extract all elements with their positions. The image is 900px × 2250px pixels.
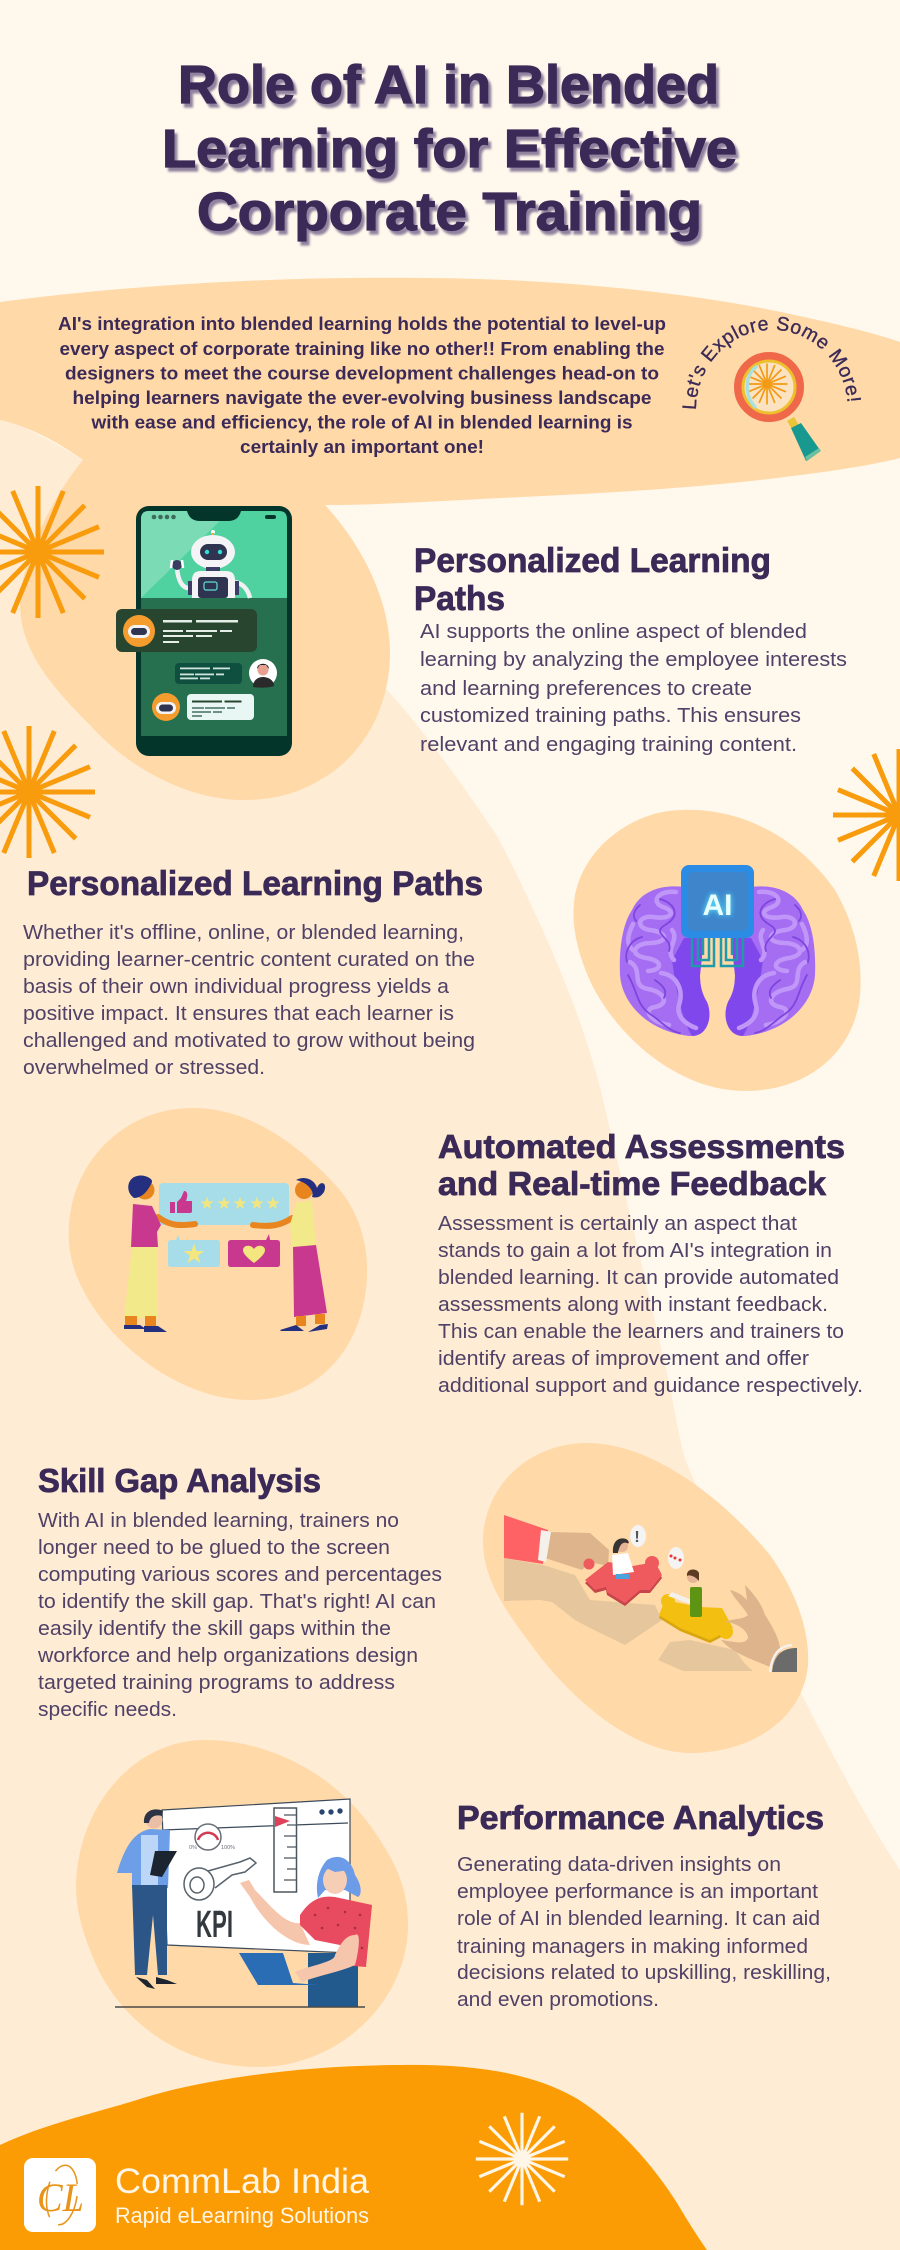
illustration: feedback people with rating card bbox=[124, 1175, 328, 1332]
man on yellow piece bbox=[668, 1570, 702, 1617]
chat bubble 1 bbox=[116, 609, 257, 652]
section 2: personalized learning paths (left) bbox=[23, 865, 483, 1079]
intro text: helping learners navigate the ever-evolving business landscape bbox=[72, 387, 652, 408]
body text: AI supports the online aspect of blended bbox=[420, 621, 807, 643]
body text: basis of their own individual progress yields a bbox=[23, 976, 450, 998]
speech bubbles bbox=[630, 1525, 684, 1569]
illustration: AI brain: AI bbox=[702, 889, 732, 922]
body text: additional support and guidance respectively. bbox=[438, 1375, 863, 1397]
body text: longer need to be glued to the screen bbox=[38, 1537, 390, 1559]
board bbox=[162, 1799, 350, 1953]
body text: workforce and help organizations design bbox=[37, 1645, 418, 1667]
body text bbox=[420, 621, 847, 756]
left person bbox=[124, 1175, 195, 1332]
footer orange shape bbox=[0, 2065, 707, 2250]
illustration: phone with chatbot bbox=[116, 506, 292, 756]
body text: computing various scores and percentages bbox=[38, 1564, 442, 1586]
body text: targeted training programs to address bbox=[38, 1672, 395, 1694]
body text: providing learner-centric content curated on the bbox=[23, 949, 475, 971]
intro text: every aspect of corporate training like no other!! From enabling the bbox=[60, 338, 664, 359]
body text bbox=[438, 1213, 863, 1397]
key bbox=[184, 1858, 256, 1900]
stars: ★ bbox=[265, 1194, 281, 1213]
body text: to identify the skill gap. That's right! AI can bbox=[38, 1591, 436, 1613]
blob: feedback background bbox=[69, 1108, 367, 1400]
blob: puzzle background bbox=[483, 1443, 808, 1753]
stars: ★ bbox=[249, 1194, 265, 1213]
body text: assessments along with instant feedback. bbox=[438, 1294, 828, 1316]
heading: Paths bbox=[414, 580, 505, 618]
laptop bbox=[239, 1953, 320, 1985]
illustration: puzzle pieces with hands bbox=[504, 1515, 797, 1672]
thermometer bbox=[274, 1808, 296, 1892]
body text: blended learning. It can provide automated bbox=[438, 1267, 839, 1289]
woman on red piece bbox=[612, 1538, 634, 1579]
intro text: designers to meet the course development challenges head-on to bbox=[65, 362, 659, 384]
heart bubble bbox=[228, 1234, 280, 1267]
star bubble bbox=[168, 1235, 220, 1267]
panel: intro band with phone blob bbox=[0, 278, 900, 800]
body text: positive impact. It ensures that each learner is bbox=[23, 1003, 454, 1025]
stars: ★ bbox=[199, 1194, 215, 1213]
KPI label: KPI bbox=[196, 1904, 233, 1946]
gauge: 100% bbox=[221, 1845, 235, 1851]
icon: magnifying glass bbox=[738, 356, 821, 461]
body text: role of AI in blended learning. It can aid bbox=[457, 1908, 820, 1930]
body text: and even promotions. bbox=[457, 1989, 659, 2011]
body text: This can enable the learners and trainers to bbox=[438, 1321, 844, 1343]
intro text: with ease and efficiency, the role of AI in blended learning is bbox=[90, 412, 632, 432]
heading: and Real-time Feedback bbox=[438, 1165, 827, 1202]
intro text bbox=[58, 313, 666, 457]
stars bbox=[199, 1194, 281, 1213]
woman bbox=[240, 1857, 372, 2007]
title bbox=[162, 55, 737, 242]
gauge bbox=[189, 1824, 235, 1851]
stars: ★ bbox=[216, 1194, 232, 1213]
red puzzle piece bbox=[584, 1556, 662, 1606]
heading: Performance Analytics bbox=[457, 1799, 824, 1836]
left hand and sleeve bbox=[504, 1515, 548, 1564]
heading: Personalized Learning Paths bbox=[27, 865, 483, 903]
blob: brain background bbox=[574, 810, 861, 1091]
illustration: KPI board with two people bbox=[115, 1799, 372, 2007]
heading bbox=[438, 1128, 845, 1202]
logo tile: CL bbox=[37, 2175, 84, 2220]
body text: and learning preferences to create bbox=[420, 678, 752, 700]
heading: Skill Gap Analysis bbox=[38, 1462, 321, 1499]
body text: Generating data-driven insights on bbox=[457, 1854, 781, 1876]
chat bubble 3 bbox=[152, 693, 254, 721]
stars: ★ bbox=[232, 1194, 248, 1213]
rating card bbox=[159, 1183, 289, 1225]
logo: CommLab India bbox=[24, 2158, 370, 2232]
body text bbox=[37, 1510, 442, 1721]
body text: stands to gain a lot from AI's integration in bbox=[438, 1240, 832, 1262]
title: Learning for Effective bbox=[162, 119, 737, 179]
body text: decisions related to upskilling, reskilling, bbox=[457, 1962, 831, 1984]
section 5: performance analytics bbox=[457, 1799, 831, 2011]
body text: relevant and engaging training content. bbox=[420, 734, 797, 756]
body text: training managers in making informed bbox=[457, 1936, 808, 1958]
logo name: CommLab India bbox=[115, 2162, 370, 2201]
thumb up bbox=[170, 1191, 192, 1213]
yellow puzzle piece bbox=[659, 1594, 733, 1643]
right hand and sleeve bbox=[721, 1585, 780, 1668]
blob: KPI background bbox=[76, 1740, 408, 2067]
ground line bbox=[115, 2006, 365, 2008]
body text: customized training paths. This ensures bbox=[420, 705, 801, 727]
body text: With AI in blended learning, trainers no bbox=[38, 1510, 399, 1532]
illustration: AI brain bbox=[620, 865, 815, 1036]
icon: sunburst right bbox=[833, 749, 900, 881]
body text: challenged and motivated to grow without being bbox=[23, 1030, 475, 1052]
icon: sunburst left lower bbox=[0, 726, 95, 858]
body text bbox=[23, 922, 475, 1079]
gauge: 0% bbox=[189, 1845, 197, 1851]
speech bubbles: ! bbox=[634, 1529, 640, 1546]
heading: Personalized Learning bbox=[414, 542, 771, 580]
illustration: feedback people with rating card: ★ bbox=[182, 1239, 206, 1269]
icon: sunburst left top bbox=[0, 486, 104, 618]
puzzle shadows bbox=[504, 1558, 662, 1645]
body text: employee performance is an important bbox=[457, 1881, 818, 1903]
right person bbox=[253, 1178, 328, 1332]
title: Role of AI in Blended bbox=[178, 55, 719, 115]
section 4: skill gap analysis bbox=[37, 1462, 442, 1721]
man bbox=[117, 1809, 177, 1989]
body text: easily identify the skill gaps within the bbox=[38, 1618, 391, 1640]
heading: Automated Assessments bbox=[438, 1128, 845, 1165]
logo tile bbox=[24, 2158, 96, 2232]
body text: identify areas of improvement and offer bbox=[438, 1348, 809, 1370]
logo tagline: Rapid eLearning Solutions bbox=[115, 2203, 369, 2228]
section 3: automated assessments bbox=[438, 1128, 863, 1397]
body text: overwhelmed or stressed. bbox=[23, 1057, 265, 1079]
intro text: AI's integration into blended learning holds the potential to level-up bbox=[58, 313, 666, 334]
section 1: personalized learning paths (right) bbox=[414, 542, 847, 756]
body text bbox=[457, 1854, 831, 2011]
body text: Assessment is certainly an aspect that bbox=[438, 1213, 797, 1235]
body text: Whether it's offline, online, or blended learning, bbox=[23, 922, 464, 944]
robot bbox=[171, 530, 250, 598]
title: Corporate Training bbox=[197, 182, 702, 242]
window dots bbox=[319, 1808, 343, 1815]
heading bbox=[414, 542, 771, 618]
icon: white sunburst bbox=[476, 2113, 568, 2205]
body text: learning by analyzing the employee interests bbox=[420, 649, 847, 671]
curved label: Let's Explore Some More!: Let's Explore Some More! bbox=[682, 316, 861, 409]
chat bubble 2 bbox=[175, 659, 277, 688]
body text: specific needs. bbox=[38, 1699, 177, 1721]
intro text: certainly an important one! bbox=[240, 436, 484, 457]
